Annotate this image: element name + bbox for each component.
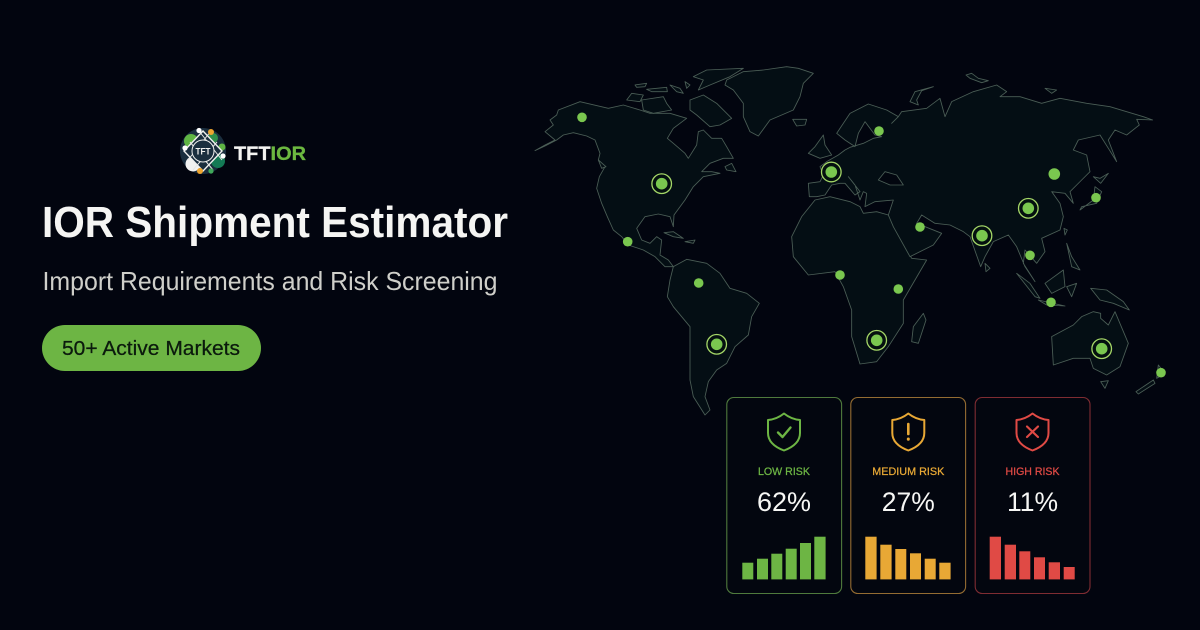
- africa: [792, 197, 927, 364]
- value: 11%: 11%: [1007, 487, 1058, 517]
- eurasia: [808, 85, 1153, 282]
- label: high risk: HIGH RISK: [1006, 466, 1060, 478]
- title: IOR Shipment Estimator: [42, 198, 508, 247]
- hub marker: china: [1019, 198, 1038, 218]
- value: 27%: 27%: [882, 487, 935, 517]
- bar chart: medium risk: [865, 537, 951, 579]
- small markers: [577, 112, 1166, 378]
- icon: shield x: [1016, 414, 1048, 450]
- market markers: [577, 112, 1166, 378]
- hub marker: australia: [1092, 339, 1111, 359]
- hub marker: north america: [652, 174, 672, 194]
- hub marker: southern africa: [867, 330, 886, 350]
- badge: active markets: 50+ Active Markets: [62, 338, 240, 360]
- bar chart: high risk: [990, 537, 1075, 579]
- icon: shield check: [768, 414, 800, 450]
- panel: high risk: [975, 398, 1090, 594]
- hub marker: south america: [707, 334, 726, 354]
- hub marker: india: [972, 226, 992, 246]
- label: medium risk: MEDIUM RISK: [872, 466, 945, 478]
- hero text block: [42, 128, 508, 371]
- map landmasses: [535, 67, 1165, 415]
- panel: medium risk: [851, 398, 966, 594]
- value: 62%: 62%: [757, 487, 811, 517]
- subtitle: Import Requirements and Risk Screening: [42, 266, 498, 296]
- badge: active markets: [42, 325, 261, 371]
- arctic islands: [598, 68, 743, 243]
- north america: [535, 102, 733, 267]
- label: low risk: LOW RISK: [758, 466, 811, 478]
- new zealand and tasmania: [1101, 365, 1165, 394]
- world map: [535, 67, 1166, 593]
- hub marker: europe: [822, 162, 841, 182]
- logo: TFTIOR: [180, 128, 306, 174]
- greenland: [725, 67, 813, 136]
- europe and asia islands: [808, 73, 1129, 343]
- australia: [1052, 312, 1128, 375]
- wordmark: TFTIOR: [234, 144, 306, 165]
- icon: network badge: TFT: [196, 146, 211, 158]
- south america: [667, 259, 759, 415]
- iceland: [793, 119, 807, 126]
- icon: shield alert: [892, 414, 924, 450]
- black sea: [878, 172, 903, 185]
- bar chart: low risk: [742, 537, 826, 579]
- panel: low risk: [727, 398, 842, 594]
